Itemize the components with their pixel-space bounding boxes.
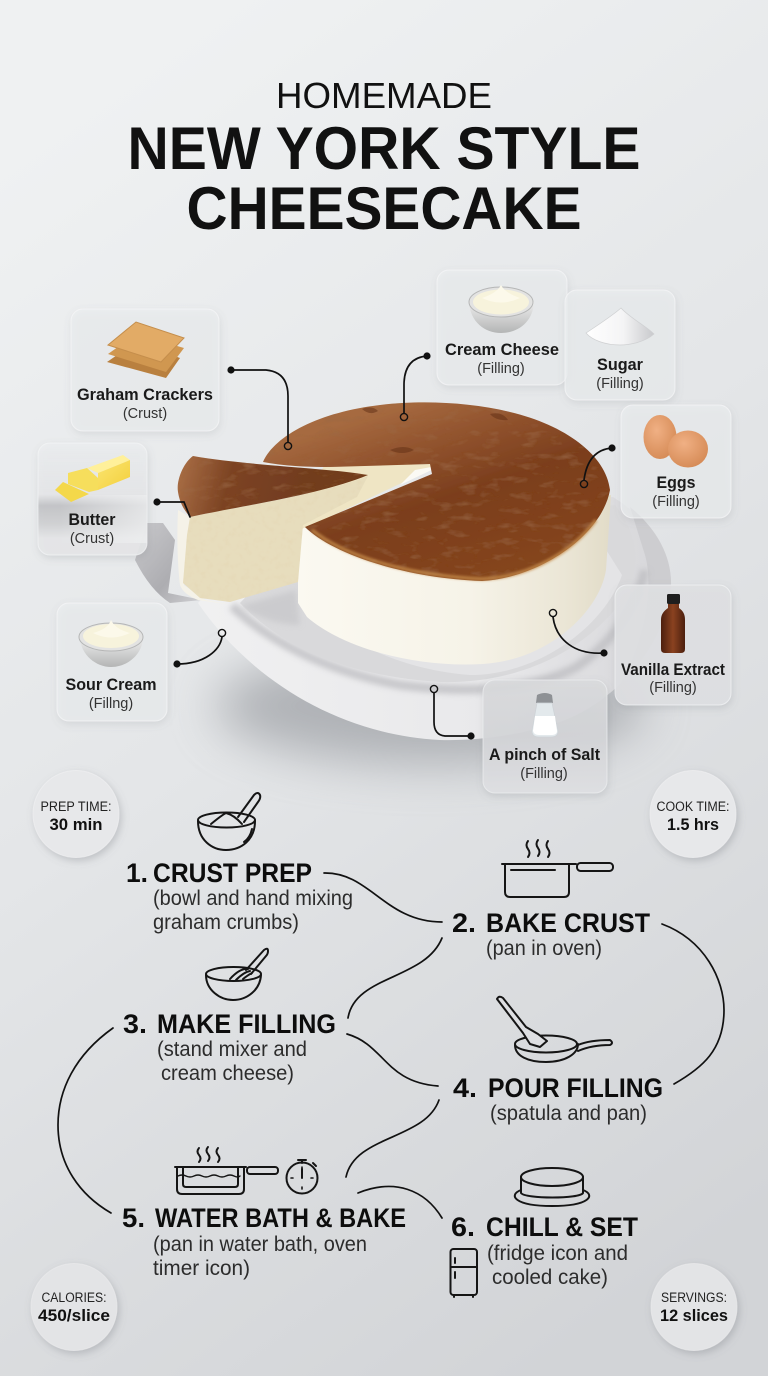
step 5 xyxy=(122,1147,406,1280)
badge: prep time: PREP TIME: xyxy=(40,799,112,814)
step 6: 6. xyxy=(451,1212,475,1242)
badge: cook time: 1.5 hrs xyxy=(667,815,719,834)
marble plate xyxy=(198,497,671,740)
step 5: (pan in water bath, oven xyxy=(153,1233,367,1256)
badge: servings: SERVINGS: xyxy=(661,1290,727,1305)
lifted slice face xyxy=(183,476,368,602)
card: sugar: Sugar xyxy=(597,356,644,374)
badge: calories xyxy=(31,1264,117,1350)
connector lines xyxy=(153,352,616,740)
title xyxy=(128,75,640,242)
badge: servings xyxy=(651,1264,737,1350)
step 1: CRUST PREP xyxy=(153,858,312,888)
connector: eggs xyxy=(580,444,616,488)
icon: bowl with crumbs and spoon xyxy=(198,793,260,850)
card: sour cream: Sour Cream xyxy=(66,676,156,694)
connector: vanilla xyxy=(549,609,608,657)
step 1: (bowl and hand mixing xyxy=(153,887,353,910)
icon: spatula and pan xyxy=(497,997,612,1062)
cake side xyxy=(298,495,611,665)
card: sour cream: (Fillng) xyxy=(89,696,133,712)
card: vanilla extract: (Filling) xyxy=(649,680,697,696)
card: butter: (Crust) xyxy=(70,531,114,547)
card: eggs: (Filling) xyxy=(652,494,700,510)
cake interior at cut xyxy=(296,464,442,545)
icon: pan with steam xyxy=(502,840,613,897)
step 2: 2. xyxy=(452,908,476,938)
step 4: POUR FILLING xyxy=(488,1073,663,1103)
icon: sugar pile xyxy=(586,308,654,345)
step 3: cream cheese) xyxy=(161,1062,294,1085)
card: a pinch of salt: A pinch of Salt xyxy=(489,746,600,764)
step 2 xyxy=(452,840,650,960)
plate marble right edge xyxy=(620,507,671,685)
badge: cook time: COOK TIME: xyxy=(656,799,730,814)
title: HOMEMADE xyxy=(276,75,492,116)
card: graham crackers xyxy=(71,309,219,431)
card: cream cheese xyxy=(437,270,567,385)
card: a pinch of salt xyxy=(483,680,607,793)
parchment xyxy=(240,505,635,682)
step 6: cooled cake) xyxy=(492,1266,608,1289)
card: eggs xyxy=(621,405,731,518)
icon: cooled cake xyxy=(515,1168,589,1206)
icon: butter xyxy=(55,455,130,502)
icon: vanilla bottle xyxy=(661,594,685,653)
title: NEW YORK STYLE xyxy=(128,115,640,182)
crust caramel edge xyxy=(312,520,596,579)
card: cream cheese: (Filling) xyxy=(477,361,525,377)
step 5: timer icon) xyxy=(153,1257,250,1280)
badge: prep time xyxy=(33,770,119,858)
step 3: MAKE FILLING xyxy=(157,1009,336,1039)
connector: sour cream xyxy=(173,629,226,668)
icon: fridge xyxy=(450,1249,477,1297)
cake top crust xyxy=(263,402,610,581)
step 6: (fridge icon and xyxy=(487,1242,628,1265)
step 3: 3. xyxy=(123,1009,147,1039)
lifted slice crust xyxy=(178,456,368,517)
icon: salt shaker xyxy=(532,693,558,737)
icon: graham crackers xyxy=(107,322,184,378)
card: vanilla extract: Vanilla Extract xyxy=(621,661,725,679)
step 6 xyxy=(450,1168,638,1297)
step 1: 1. xyxy=(126,858,148,888)
step 4: (spatula and pan) xyxy=(490,1102,647,1125)
step 6: CHILL & SET xyxy=(486,1212,638,1242)
icon: timer xyxy=(286,1160,318,1194)
step 5: 5. xyxy=(122,1203,145,1233)
process flow arrows xyxy=(58,873,724,1218)
connector: butter xyxy=(153,498,190,517)
icon: eggs xyxy=(644,415,708,468)
badge: calories: 450/slice xyxy=(38,1306,110,1325)
card: butter: Butter xyxy=(68,511,116,529)
step 2: BAKE CRUST xyxy=(486,908,650,938)
badge: prep time: 30 min xyxy=(50,815,102,834)
card: a pinch of salt: (Filling) xyxy=(520,766,568,782)
crust blotches xyxy=(362,407,508,453)
icon: sour cream bowl xyxy=(79,620,143,667)
title: CHEESECAKE xyxy=(186,175,582,242)
plate shaded band xyxy=(232,570,645,689)
card: butter xyxy=(38,443,147,555)
slice white edge xyxy=(177,510,232,605)
cake server xyxy=(135,523,202,603)
card: vanilla extract xyxy=(615,585,731,705)
card: sugar xyxy=(565,290,675,400)
connector: salt xyxy=(430,685,475,740)
badge: servings: 12 slices xyxy=(660,1306,728,1325)
step 3: (stand mixer and xyxy=(157,1038,307,1061)
connector: graham crackers xyxy=(227,366,292,450)
step 4 xyxy=(453,997,663,1125)
card: cream cheese: Cream Cheese xyxy=(445,341,559,359)
badge: cook time xyxy=(650,770,736,858)
icon: cream cheese bowl xyxy=(469,285,534,333)
plate shadow xyxy=(215,648,645,764)
card: eggs: Eggs xyxy=(656,474,696,492)
badge: calories: CALORIES: xyxy=(42,1290,106,1305)
step 1 xyxy=(126,793,353,934)
icon: water bath pan xyxy=(175,1147,278,1194)
card: graham crackers: (Crust) xyxy=(123,406,167,422)
connector: cream cheese xyxy=(400,352,431,421)
step 3 xyxy=(123,949,336,1085)
icon: bowl with whisk xyxy=(206,949,268,1000)
step 1: graham crumbs) xyxy=(153,911,299,934)
step 5: WATER BATH & BAKE xyxy=(155,1203,406,1233)
cheesecake on marble plate xyxy=(135,402,671,764)
step 2: (pan in oven) xyxy=(486,937,602,960)
card: sugar: (Filling) xyxy=(596,376,644,392)
card: graham crackers: Graham Crackers xyxy=(77,386,213,404)
step 4: 4. xyxy=(453,1073,477,1103)
card: sour cream xyxy=(57,603,167,721)
